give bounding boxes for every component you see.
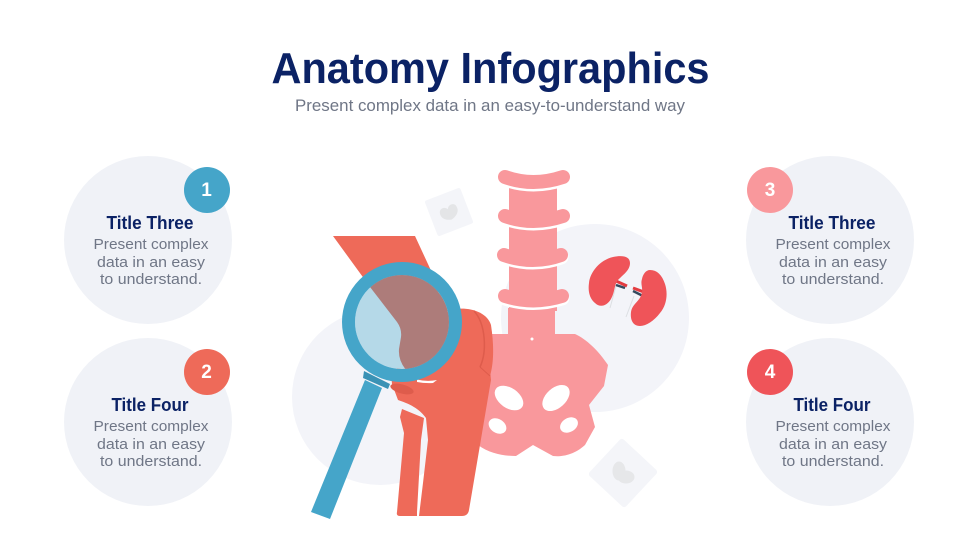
magnified bone	[370, 275, 449, 369]
badge 2: 2	[201, 362, 212, 383]
icon: card with heart bottom	[588, 438, 658, 508]
collar	[363, 371, 390, 389]
icon: card with heart top	[424, 187, 474, 237]
background circle right	[501, 224, 689, 412]
panel: item 1	[64, 156, 232, 324]
item 4 text: Present complex	[776, 418, 891, 435]
lens ring	[348, 268, 456, 376]
magnifying glass	[311, 268, 460, 519]
icon: kidneys	[589, 256, 667, 326]
anatomy illustration	[292, 177, 689, 519]
pelvis	[478, 334, 608, 456]
item 3 text	[776, 213, 891, 288]
item 4 text: to understand.	[782, 453, 884, 470]
item 1 text	[94, 213, 209, 288]
item 1 text: Title Three	[106, 213, 194, 233]
lens	[355, 275, 449, 369]
item 3 text: Title Three	[788, 213, 876, 233]
item 2 text: to understand.	[100, 453, 202, 470]
badge 1: 1	[201, 180, 212, 201]
item 2 text: Title Four	[112, 395, 188, 415]
badge 3	[747, 167, 793, 213]
item 4 text	[776, 395, 891, 470]
badge 1	[184, 167, 230, 213]
item 3 text: Present complex	[776, 236, 891, 253]
background circle left	[292, 309, 468, 485]
tibia	[391, 370, 491, 516]
handle	[311, 380, 382, 519]
fibula	[397, 409, 424, 516]
badge 2	[184, 349, 230, 395]
item 1 text: data in an easy	[97, 254, 206, 271]
panel: item 4	[746, 338, 914, 506]
item 2 text: Present complex	[94, 418, 209, 435]
item 2 text: data in an easy	[97, 436, 206, 453]
badge 4	[747, 349, 793, 395]
panel: item 3	[746, 156, 914, 324]
item 4 text: data in an easy	[779, 436, 888, 453]
badge 4: 4	[765, 362, 776, 383]
subtitle: Present complex data in an easy-to-understand way	[295, 97, 686, 115]
title: Anatomy Infographics	[272, 44, 710, 93]
item 1 text: to understand.	[100, 271, 202, 288]
item 1 text: Present complex	[94, 236, 209, 253]
white joint gap	[417, 380, 437, 383]
badge 3: 3	[765, 180, 775, 201]
spine	[504, 177, 563, 338]
femur	[333, 236, 440, 330]
item 4 text: Title Four	[794, 395, 870, 415]
item 2 text	[94, 395, 209, 470]
panel: item 2	[64, 338, 232, 506]
item 3 text: data in an easy	[779, 254, 888, 271]
item 3 text: to understand.	[782, 271, 884, 288]
knee joint	[389, 309, 493, 396]
